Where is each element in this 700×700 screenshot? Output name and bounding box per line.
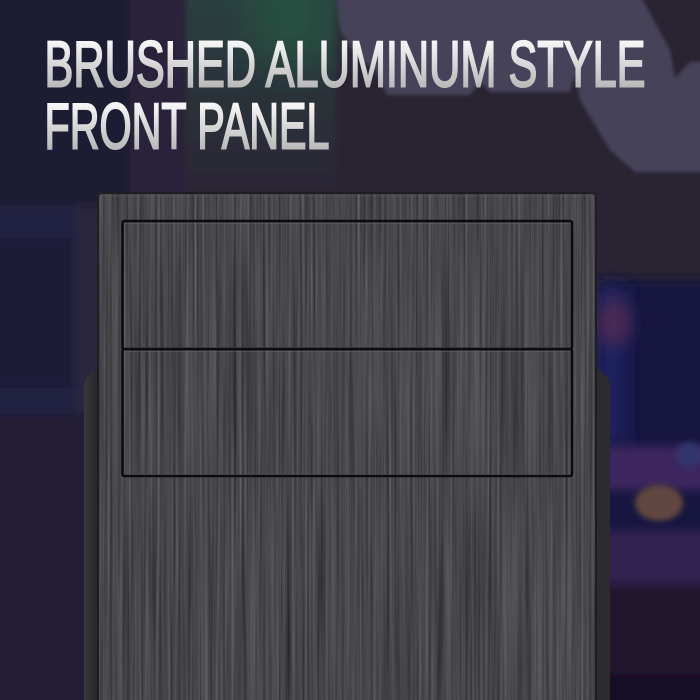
title: FRONT PANEL	[44, 90, 330, 162]
bevel edge	[98, 192, 596, 700]
upper drive bay panel	[122, 221, 572, 349]
title	[44, 28, 646, 162]
blue bokeh	[676, 442, 700, 468]
orange bokeh	[635, 485, 683, 521]
dim green column	[186, 0, 336, 190]
inner bevel highlight	[101, 196, 593, 700]
pink glow	[598, 298, 630, 346]
blue side glow	[596, 285, 626, 445]
lower drive bay panel	[122, 349, 572, 476]
right side foot	[597, 368, 610, 700]
green glow	[255, 0, 330, 60]
lavender blurred shape	[336, 0, 700, 172]
left side foot	[84, 368, 97, 700]
computer case front panel	[97, 192, 597, 700]
purple bands	[600, 446, 700, 700]
